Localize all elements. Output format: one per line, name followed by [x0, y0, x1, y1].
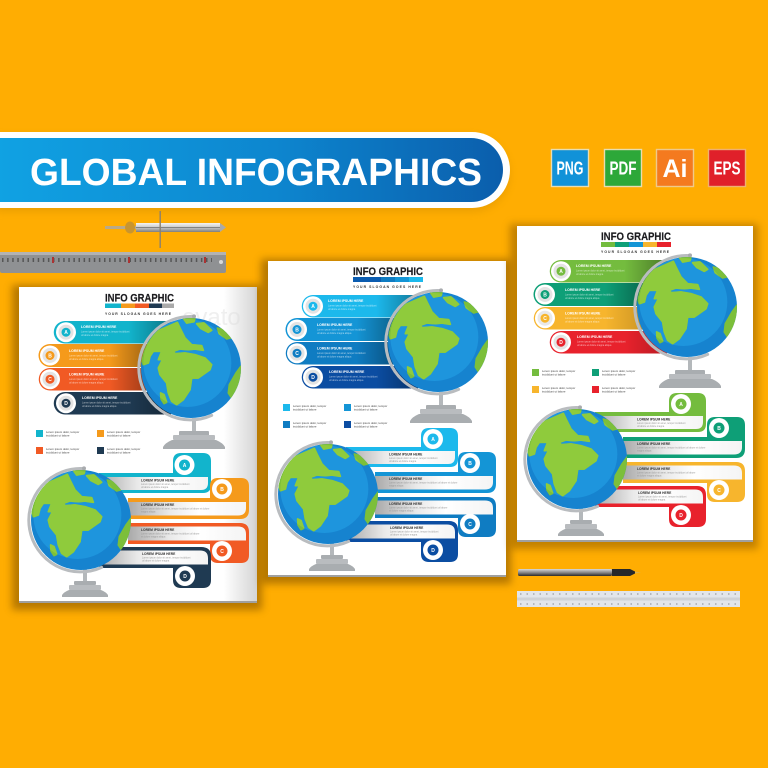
bar D: LOREM IPSUM HERE: [82, 396, 118, 400]
bar C: LOREM IPSUM HERE: [317, 346, 353, 350]
bar B: B: [48, 353, 52, 359]
legend: [532, 369, 635, 394]
icon: drafting compass: [105, 211, 226, 248]
bar B: B: [295, 327, 299, 333]
bar A: [54, 321, 171, 344]
box A: ut labore et dolore magna: [637, 425, 665, 428]
box B: magna aliqua: [389, 484, 404, 488]
panel: sheet 1: [12, 285, 262, 610]
bar A: [302, 295, 418, 318]
box B: Lorem ipsum dolor sit amet, tempor incididunt ut labore et dolore: [389, 482, 458, 484]
bar B: ut labore et dolore magna aliqua: [565, 297, 600, 300]
sheet title: INFO GRAPHIC: [105, 292, 174, 304]
icon: pen: [518, 569, 641, 576]
box D: D: [183, 574, 187, 580]
sheet background: [19, 287, 257, 603]
bar D: Lorem ipsum dolor sit amet, tempor incididunt: [82, 402, 131, 404]
icon: PNG: [552, 150, 588, 186]
box B: [623, 417, 745, 458]
legend: incididunt ut labore: [293, 424, 317, 428]
box D: [346, 521, 458, 562]
box A: ut labore et dolore magna: [141, 486, 169, 489]
icon: EPS: [708, 150, 746, 186]
box B: [128, 478, 249, 519]
bottom globe with stand: [276, 440, 382, 571]
box B: LOREM IPSUM HERE: [141, 503, 175, 507]
bar C: C: [48, 377, 52, 383]
box C: [375, 497, 496, 537]
legend: incididunt ut labore: [602, 390, 626, 394]
top globe with stand: [635, 253, 741, 388]
box B: Lorem ipsum dolor sit amet, tempor incididunt ut labore et dolore: [637, 446, 706, 450]
legend: Lorem ipsum dolor, tempor: [602, 369, 635, 373]
title banner: [0, 132, 510, 212]
box A: Lorem ipsum dolor sit amet, tempor incididunt: [141, 483, 190, 486]
bar C: ut labore et dolore magna aliqua: [69, 382, 104, 384]
colour strip: [353, 277, 423, 282]
legend: Lorem ipsum dolor, tempor: [46, 430, 79, 434]
box C: et dolore magna aliqua: [389, 510, 414, 512]
bar B: LOREM IPSUM HERE: [565, 288, 601, 292]
bar B: [286, 318, 396, 341]
legend: incididunt ut labore: [107, 434, 131, 438]
box D: LOREM IPSUM HERE: [390, 526, 424, 530]
bar B: Lorem ipsum dolor sit amet, tempor incididunt: [69, 354, 118, 358]
bar A: ut labore et dolore magna: [328, 308, 356, 311]
bar D: D: [311, 375, 315, 381]
bottom globe with stand: [525, 405, 631, 536]
legend: Lorem ipsum dolor, tempor: [293, 421, 326, 425]
legend: incididunt ut labore: [354, 424, 378, 428]
slogan: YOUR SLOGAN GOES HERE: [601, 250, 670, 254]
box D: [99, 547, 211, 588]
box B: B: [468, 461, 472, 467]
icon: PNG: PNG: [556, 158, 584, 178]
box D: ut labore et dolore magna: [142, 560, 170, 562]
legend: Lorem ipsum dolor, tempor: [107, 430, 140, 434]
box A: [99, 453, 211, 493]
box A: A: [679, 402, 683, 408]
bar A: ut labore et dolore magna: [576, 273, 604, 276]
legend: incididunt ut labore: [542, 390, 566, 394]
legend: Lorem ipsum dolor, tempor: [542, 386, 575, 390]
panel: sheet 2: [261, 259, 511, 584]
box A: A: [431, 437, 435, 443]
banner heading: GLOBAL INFOGRAPHICS: [30, 152, 482, 194]
bar D: Lorem ipsum dolor sit amet, tempor incididunt: [329, 376, 378, 378]
box A: LOREM IPSUM HERE: [637, 418, 671, 422]
box D: LOREM IPSUM HERE: [142, 552, 176, 556]
box D: ut labore et dolore magna: [390, 534, 418, 536]
icon: PDF: PDF: [610, 158, 637, 178]
box C: [128, 523, 249, 563]
box A: Lorem ipsum dolor sit amet, tempor incididunt: [389, 457, 438, 460]
icon: PDF: [604, 150, 642, 186]
panel: sheet 3: [510, 224, 758, 549]
bar B: Lorem ipsum dolor sit amet, tempor incididunt: [317, 328, 366, 332]
bar C: Lorem ipsum dolor sit amet, tempor incididunt: [69, 378, 118, 381]
bar D: Lorem ipsum dolor sit amet, tempor incididunt: [577, 340, 626, 344]
box B: B: [220, 487, 224, 493]
sheet title: INFO GRAPHIC: [601, 231, 671, 243]
box B: LOREM IPSUM HERE: [389, 477, 423, 481]
icon: Ai: [656, 150, 694, 186]
bar A: A: [64, 330, 68, 336]
watermark: evato: [182, 304, 241, 331]
bar C: [286, 342, 396, 364]
bar B: B: [543, 292, 547, 298]
box A: Lorem ipsum dolor sit amet, tempor incididunt: [637, 422, 686, 425]
icon: EPS: EPS: [714, 158, 740, 178]
sheet title: INFO GRAPHIC: [353, 266, 423, 278]
top globe with stand: [386, 288, 492, 423]
box C: Lorem ipsum dolor sit amet, tempor incididunt ut labore: [141, 532, 200, 536]
box C: et dolore magna aliqua: [141, 536, 166, 538]
bar C: LOREM IPSUM HERE: [69, 372, 105, 376]
legend: incididunt ut labore: [46, 434, 70, 438]
bar D: ut labore et dolore magna aliqua: [329, 379, 364, 382]
bar D: ut labore et dolore magna aliqua: [82, 405, 117, 408]
legend: [283, 404, 387, 428]
box B: magna aliqua: [141, 510, 156, 514]
bar C: [39, 368, 149, 390]
colour strip: [601, 242, 671, 247]
bar C: [534, 307, 645, 330]
box D: Lorem ipsum dolor sit amet, tempor incididunt: [142, 556, 191, 560]
legend: Lorem ipsum dolor, tempor: [354, 404, 387, 408]
icon: white ruler: [517, 591, 740, 607]
legend: incididunt ut labore: [46, 450, 70, 454]
bar A: [550, 260, 667, 282]
bar A: A: [559, 269, 563, 275]
bar B: ut labore et dolore magna aliqua: [69, 358, 104, 361]
bar D: ut labore et dolore magna aliqua: [577, 344, 612, 347]
icon: steel ruler: [0, 252, 226, 273]
top globe with stand: [139, 314, 245, 449]
box D: D: [431, 548, 435, 554]
box B: B: [717, 426, 721, 432]
box A: [346, 428, 458, 467]
bar C: Lorem ipsum dolor sit amet, tempor incididunt: [565, 317, 614, 320]
sheet background: [517, 226, 753, 542]
bar D: LOREM IPSUM HERE: [577, 335, 613, 339]
box C: C: [220, 549, 224, 555]
bar C: Lorem ipsum dolor sit amet, tempor incididunt: [317, 352, 366, 355]
box D: ut labore et dolore magna: [638, 498, 666, 502]
legend: Lorem ipsum dolor, tempor: [354, 421, 387, 425]
bar B: LOREM IPSUM HERE: [317, 323, 353, 327]
box A: ut labore et dolore magna: [389, 460, 417, 463]
bar C: C: [295, 351, 299, 357]
slogan: YOUR SLOGAN GOES HERE: [105, 312, 172, 316]
box B: Lorem ipsum dolor sit amet, tempor incididunt ut labore et dolore: [141, 508, 210, 510]
box C: LOREM IPSUM HERE: [141, 528, 175, 532]
box B: magna aliqua: [637, 450, 652, 452]
legend: incididunt ut labore: [542, 372, 566, 376]
box B: [375, 452, 496, 493]
box C: LOREM IPSUM HERE: [637, 467, 671, 471]
legend: [36, 430, 140, 454]
bar B: ut labore et dolore magna aliqua: [317, 332, 352, 335]
box C: LOREM IPSUM HERE: [389, 502, 423, 506]
icon: Ai: Ai: [662, 155, 688, 183]
box C: et dolore magna aliqua: [637, 474, 662, 478]
legend: Lorem ipsum dolor, tempor: [107, 447, 140, 451]
legend: incididunt ut labore: [107, 450, 131, 454]
box A: LOREM IPSUM HERE: [141, 478, 175, 482]
bar D: LOREM IPSUM HERE: [329, 370, 365, 374]
bar A: Lorem ipsum dolor sit amet, tempor incididunt: [81, 330, 130, 334]
legend: Lorem ipsum dolor, tempor: [46, 447, 79, 451]
bar C: LOREM IPSUM HERE: [565, 312, 601, 316]
box C: Lorem ipsum dolor sit amet, tempor incididunt ut labore: [637, 472, 696, 474]
box D: Lorem ipsum dolor sit amet, tempor incididunt: [638, 496, 687, 498]
box C: C: [468, 522, 472, 528]
slogan: YOUR SLOGAN GOES HERE: [353, 285, 422, 289]
bar B: Lorem ipsum dolor sit amet, tempor incididunt: [565, 294, 614, 296]
bar A: LOREM IPSUM HERE: [81, 325, 117, 329]
bar A: ut labore et dolore magna: [81, 334, 109, 337]
bar D: D: [64, 401, 68, 407]
bar D: [302, 366, 418, 388]
file format icons: [552, 150, 746, 186]
bar A: LOREM IPSUM HERE: [328, 299, 364, 303]
box C: [623, 462, 745, 502]
bar B: [534, 283, 645, 306]
box A: [595, 393, 706, 432]
box A: A: [183, 463, 187, 469]
bar A: Lorem ipsum dolor sit amet, tempor incididunt: [328, 304, 377, 308]
bar B: [38, 344, 149, 367]
legend: Lorem ipsum dolor, tempor: [602, 386, 635, 390]
box D: LOREM IPSUM HERE: [638, 491, 672, 495]
bar C: C: [543, 316, 547, 322]
legend: Lorem ipsum dolor, tempor: [542, 369, 575, 373]
legend: incididunt ut labore: [602, 372, 626, 376]
box D: [595, 486, 706, 527]
box D: D: [679, 513, 683, 519]
bar A: Lorem ipsum dolor sit amet, tempor incididunt: [576, 270, 625, 272]
box A: LOREM IPSUM HERE: [389, 452, 423, 456]
colour strip: [105, 304, 174, 308]
bottom globe with stand: [29, 466, 135, 597]
bar D: D: [559, 340, 563, 346]
bar B: LOREM IPSUM HERE: [69, 349, 105, 353]
sheet background: [268, 261, 506, 577]
bar D: [54, 392, 171, 414]
bar C: ut labore et dolore magna aliqua: [317, 356, 352, 358]
legend: incididunt ut labore: [293, 408, 317, 412]
box B: LOREM IPSUM HERE: [637, 442, 671, 446]
box C: C: [717, 488, 721, 494]
legend: Lorem ipsum dolor, tempor: [293, 404, 326, 408]
box D: Lorem ipsum dolor sit amet, tempor incididunt: [390, 530, 439, 534]
bar A: A: [311, 304, 315, 310]
bar C: ut labore et dolore magna aliqua: [565, 320, 600, 324]
bar D: [550, 331, 667, 354]
legend: incididunt ut labore: [354, 408, 378, 412]
bar A: LOREM IPSUM HERE: [576, 264, 612, 268]
box C: Lorem ipsum dolor sit amet, tempor incididunt ut labore: [389, 506, 448, 510]
